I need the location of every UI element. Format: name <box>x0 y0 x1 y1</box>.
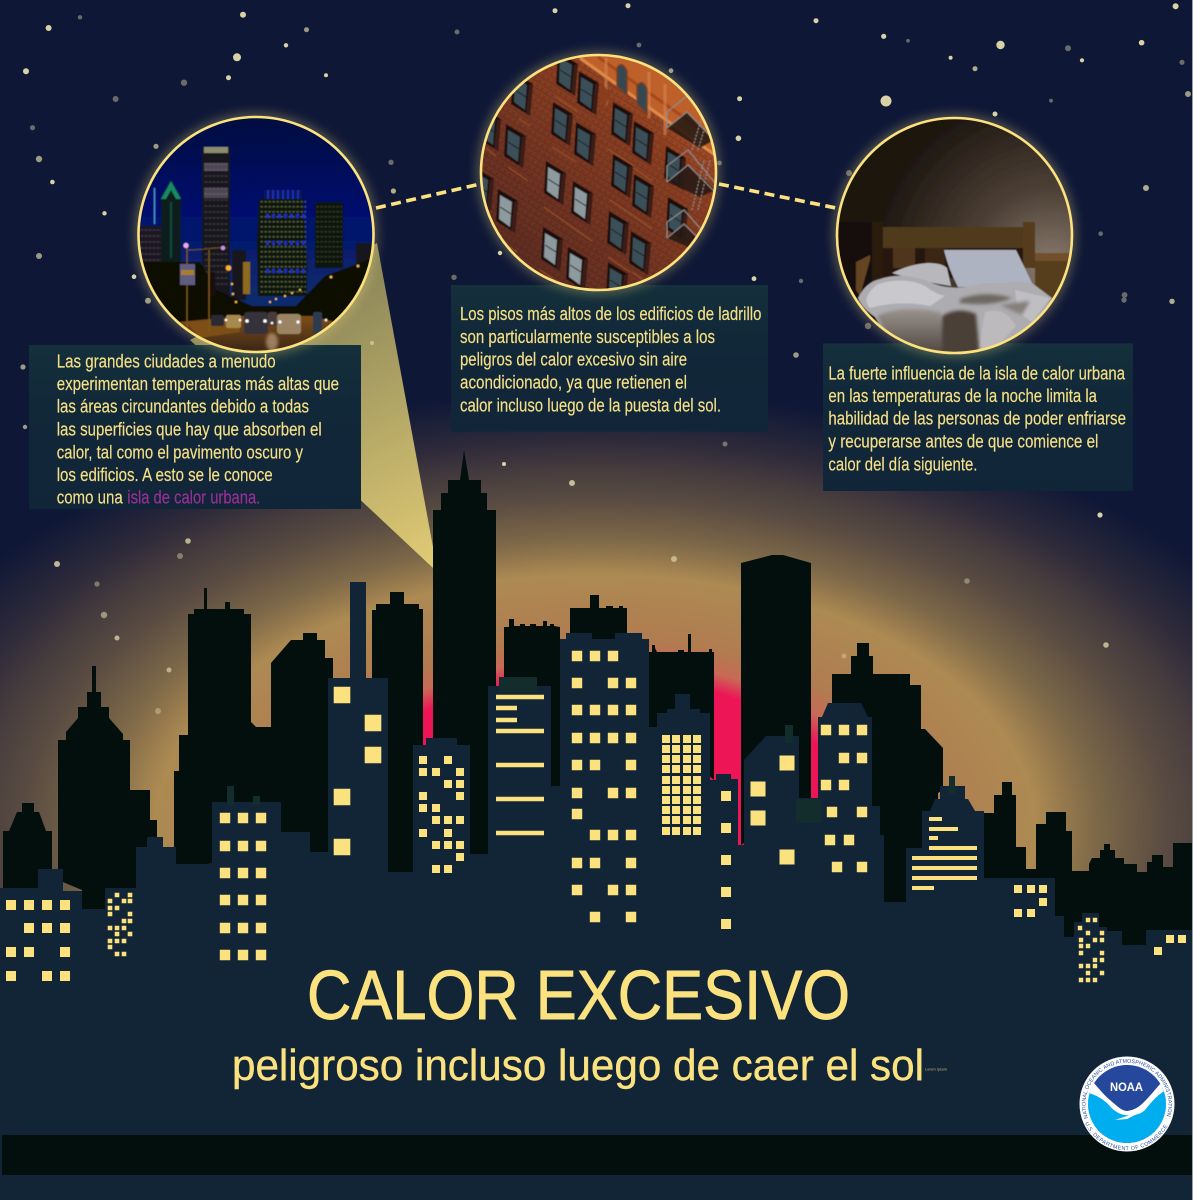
windows: speckled right <box>1080 920 1102 980</box>
panel: brick buildings text: peligros del calor excesivo sin aire <box>460 350 687 370</box>
panel: big cities text: las superficies que hay que absorben el <box>57 420 322 440</box>
panel: brick buildings text: Los pisos más altos de los edificios de ladrillo <box>460 304 761 324</box>
panel: big cities text <box>29 345 361 509</box>
panel: big cities text: isla de calor urbana. <box>127 487 260 507</box>
windows: grid building <box>666 739 697 831</box>
panel: big cities text: calor, tal como el pavimento oscuro y <box>57 442 303 462</box>
icon: NOAA logo: U.S. DEPARTMENT OF COMMERCE <box>1086 1122 1168 1150</box>
panel: night temperature text <box>823 343 1133 491</box>
panel: big cities text: las áreas circundantes debido a todas <box>57 397 309 417</box>
windows: antenna tower <box>342 695 373 847</box>
subtitle: peligroso incluso luego de caer el sol <box>232 1041 924 1090</box>
panel: big cities text: Las grandes ciudades a menudo <box>57 352 276 372</box>
title: CALOR EXCESIVO <box>307 956 850 1034</box>
tiny stray text: Lorem Ipsum <box>925 1068 947 1072</box>
rooftop chimneys <box>227 677 955 823</box>
panel: brick buildings text: calor incluso luego de la puesta del sol. <box>460 395 721 415</box>
windows: speckled center-left <box>423 760 460 869</box>
icon: NOAA logo: NATIONAL OCEANIC AND ATMOSPHERIC ADMINISTRATION <box>1082 1059 1172 1119</box>
photo circle: brick building <box>472 50 722 306</box>
lit windows <box>11 656 1182 980</box>
stars <box>20 3 1191 714</box>
windows: sloped roof building <box>758 763 787 857</box>
windows: far right <box>1158 939 1182 951</box>
bottom black band <box>2 1135 1193 1175</box>
windows: tall central building <box>577 656 631 917</box>
windows: center-right building <box>826 730 862 867</box>
photo circle: unmade bed <box>830 112 1080 362</box>
panel: brick buildings text <box>451 285 768 432</box>
panel: brick buildings text: son particularmente susceptibles a los <box>460 327 715 347</box>
windows: far left building <box>11 905 65 976</box>
windows: small speckled left <box>110 895 130 954</box>
panel: big cities text: experimentan temperaturas más altas que <box>57 374 339 394</box>
windows: striped right building <box>912 819 977 888</box>
panel: night temperature text: y recuperarse antes de que comience el <box>828 432 1098 452</box>
star on beam <box>370 341 374 345</box>
panel: brick buildings text: acondicionado, ya que retienen el <box>460 372 687 392</box>
spotlight beam from skyscraper to first photo <box>190 243 433 568</box>
skyline: front navy buildings <box>0 582 1193 1200</box>
windows: striped building <box>496 697 544 833</box>
panel: night temperature text: calor del día siguiente. <box>828 454 977 474</box>
panel: night temperature text: La fuerte influencia de la isla de calor urbana <box>828 363 1126 383</box>
photo circle: city at night <box>130 110 380 360</box>
windows: narrow tower <box>721 796 731 924</box>
panel: big cities text: los edificios. A esto se le conoce <box>57 465 273 485</box>
icon: NOAA logo <box>1080 1056 1174 1152</box>
dashed connector lines between photos <box>376 184 836 208</box>
skyline: rear black buildings <box>3 450 1193 945</box>
panel: night temperature text: habilidad de las personas de poder enfriarse <box>828 409 1126 429</box>
windows: three-column building <box>225 818 261 955</box>
panel: big cities text: como una <box>57 487 124 507</box>
windows: low right group <box>1018 889 1043 913</box>
icon: NOAA logo: NOAA <box>1110 1080 1143 1094</box>
panel: night temperature text: en las temperaturas de la noche limita la <box>828 386 1098 406</box>
